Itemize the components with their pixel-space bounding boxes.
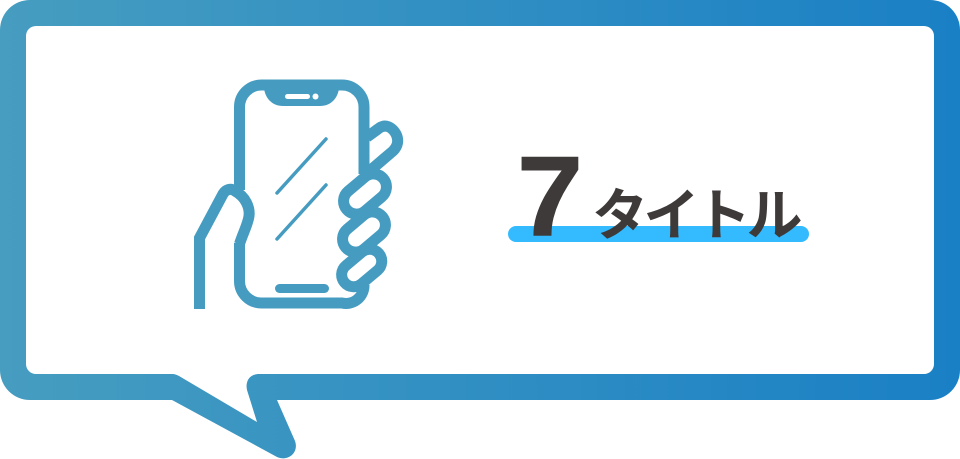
fourth finger — [337, 244, 387, 292]
notch speaker — [285, 94, 310, 99]
title underline — [508, 226, 809, 242]
title text: タイトル — [592, 184, 802, 247]
top finger — [366, 126, 398, 174]
thumb — [200, 189, 249, 309]
phone notch — [264, 88, 339, 106]
screen glare lines — [277, 139, 326, 239]
second finger — [338, 169, 392, 219]
notch camera — [312, 94, 318, 100]
title number: 7 — [517, 133, 583, 259]
home bar — [275, 284, 329, 293]
phone body outline — [240, 85, 364, 303]
icon: hand holding smartphone — [200, 85, 398, 309]
third finger — [337, 207, 391, 257]
